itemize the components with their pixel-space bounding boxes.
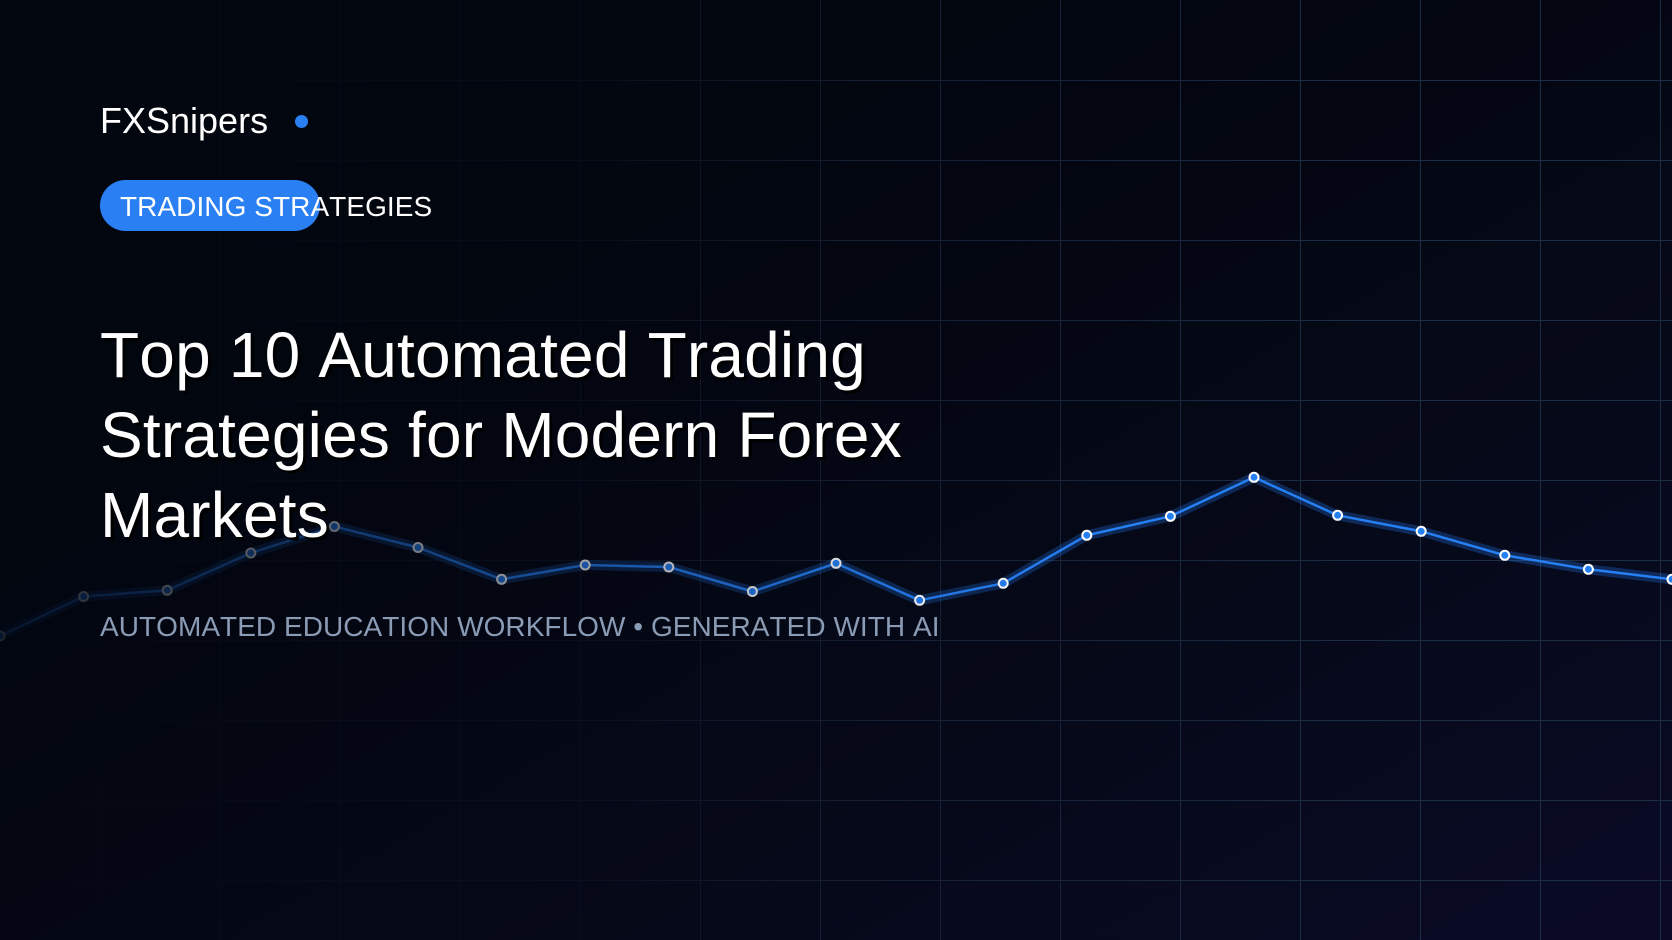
brand name: FXSnipers	[100, 100, 268, 141]
title	[100, 319, 904, 551]
title: Top 10 Automated Trading	[100, 319, 866, 391]
category pill	[100, 180, 320, 231]
title: Markets	[100, 479, 329, 551]
icon: brand dot	[295, 115, 308, 128]
title: Strategies for Modern Forex	[100, 399, 902, 471]
category label: TRADING STRATEGIES	[120, 191, 432, 222]
line chart	[0, 472, 1672, 642]
background grid	[436, 0, 1672, 940]
subtitle: AUTOMATED EDUCATION WORKFLOW • GENERATED WITH AI	[100, 611, 940, 642]
